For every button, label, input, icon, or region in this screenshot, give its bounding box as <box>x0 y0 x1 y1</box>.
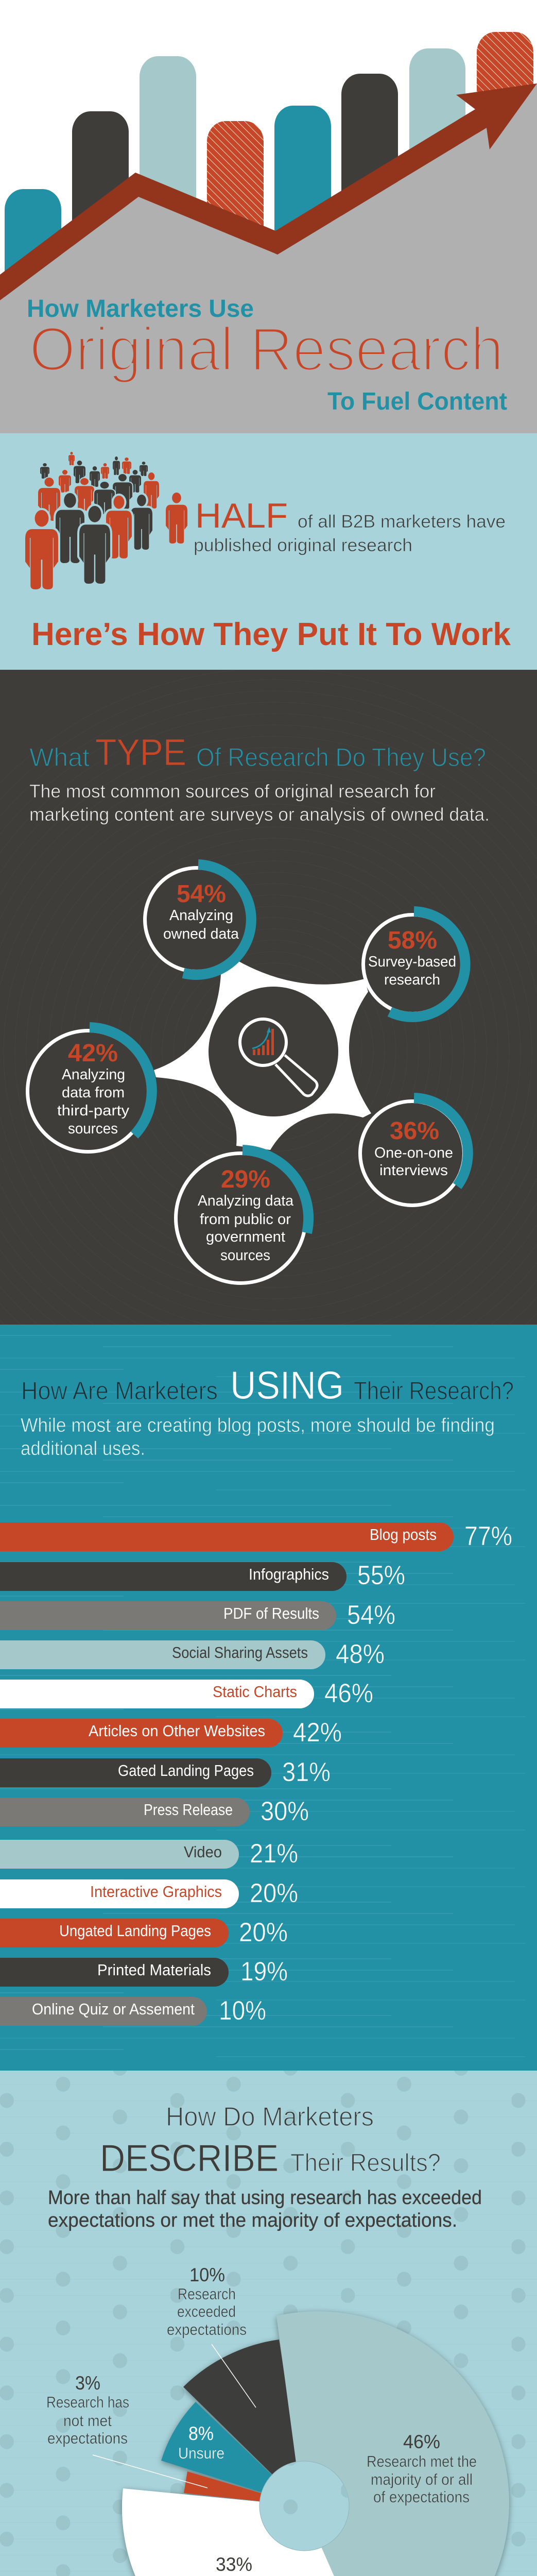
bar: printed materials 19%: 19% <box>240 1957 288 1987</box>
text: intro: More than half say that using research has exceeded <box>48 2187 482 2209</box>
bar: infographics 55%: 55% <box>357 1561 405 1590</box>
callout: 10% research exceeded expectations <box>167 2264 256 2408</box>
panel: hero header <box>0 0 537 433</box>
heading: how are marketers using: Their Research? <box>354 1377 514 1405</box>
ring: 36% one-on-one interviews <box>360 1098 468 1206</box>
callout: 3% research has not met expectations: 3% <box>75 2372 100 2394</box>
title: to fuel content: To Fuel Content <box>327 388 507 415</box>
bar: infographics 55% <box>0 1561 405 1591</box>
bar: interactive graphics 20%: Interactive Graphics <box>90 1883 222 1901</box>
text: intro: additional uses. <box>21 1438 145 1460</box>
bar: blog posts 77%: Blog posts <box>370 1526 437 1544</box>
bar: pdf of results 54% <box>0 1600 395 1630</box>
ring: 36% one-on-one interviews: interviews <box>379 1162 448 1179</box>
bar: online quiz or assement 10%: Online Quiz or Assement <box>32 2000 195 2018</box>
label: 46% research met the majority: majority of or all <box>371 2470 473 2488</box>
heading: what type of research do they use: TYPE <box>95 732 186 773</box>
bar: infographics 55%: Infographics <box>249 1565 329 1583</box>
bar chart: rising rounded bars <box>5 32 533 297</box>
label: 33% research met some <box>191 2554 278 2576</box>
heading: how do marketers: How Do Marketers <box>166 2102 374 2132</box>
bar: interactive graphics 20% <box>0 1878 298 1908</box>
ring: 29% analyzing data from public or government sources: sources <box>220 1247 270 1264</box>
bar: online quiz or assement 10%: 10% <box>219 1996 266 2026</box>
label: 8% unsure: Unsure <box>178 2444 224 2462</box>
heading: describe their results <box>100 2138 441 2179</box>
icon: single person <box>166 493 187 544</box>
label: 46% research met the majority <box>367 2431 477 2506</box>
heading: how are marketers using: USING <box>230 1364 344 1408</box>
ring: 29% analyzing data from public or government sources <box>176 1150 308 1283</box>
text: intro: expectations or met the majority of expectations. <box>48 2210 457 2231</box>
text: intro: While most are creating blog posts, more should be finding <box>21 1415 495 1436</box>
bar: printed materials 19%: Printed Materials <box>97 1961 211 1979</box>
text: intro <box>48 2187 482 2231</box>
ring: 29% analyzing data from public or government sources: Analyzing data <box>198 1193 294 1209</box>
callout: 3% research has not met expectations: expectations <box>47 2429 128 2447</box>
label: 46% research met the majority: Research met the <box>367 2452 477 2470</box>
ring: 54% analyzing owned data: 54% <box>177 880 226 908</box>
heading: what type of research do they use: Of Research Do They Use? <box>196 743 486 772</box>
ring: 42% analyzing data from third-party sources: third-party <box>57 1103 130 1119</box>
bar: ungated landing pages 20%: 20% <box>239 1918 288 1947</box>
bar: pdf of results 54%: 54% <box>347 1600 395 1630</box>
bar: video 21%: Video <box>184 1843 222 1861</box>
bar: articles on other websites 42% <box>0 1718 342 1748</box>
bar: online quiz or assement 10% <box>0 1996 266 2026</box>
icon: crowd of people <box>25 452 159 589</box>
ring: 58% survey-based research: research <box>384 972 440 988</box>
label: 46% research met the majority: of expectations <box>373 2488 470 2506</box>
ring: 54% analyzing owned data: owned data <box>163 926 239 942</box>
text: intro <box>21 1415 495 1460</box>
bar: gated landing pages 31%: Gated Landing Pages <box>118 1761 254 1780</box>
panel: how are marketers using their research <box>0 1325 537 2071</box>
bar: pdf of results 54%: PDF of Results <box>223 1604 319 1622</box>
bar: ungated landing pages 20% <box>0 1918 288 1947</box>
grey hill under arrow <box>0 83 537 433</box>
bar: press release 30%: Press Release <box>144 1801 233 1819</box>
callout: 3% research has not met expectations: Research has <box>46 2393 129 2411</box>
ring: 36% one-on-one interviews: One-on-one <box>374 1145 453 1161</box>
ring: 42% analyzing data from third-party sources: data from <box>62 1084 125 1101</box>
label: 8% unsure <box>178 2423 224 2462</box>
heading: how are marketers using <box>21 1364 514 1408</box>
heading: how are marketers using: How Are Marketers <box>21 1377 218 1405</box>
icon: magnifying glass with chart <box>240 1019 317 1096</box>
panel: how do marketers describe their results <box>0 2071 537 2576</box>
ring: 29% analyzing data from public or government sources: government <box>206 1229 285 1245</box>
bar: interactive graphics 20%: 20% <box>250 1878 298 1908</box>
callout: 3% research has not met expectations <box>46 2372 207 2488</box>
bar: social sharing assets 48% <box>0 1639 385 1669</box>
label: 8% unsure: 8% <box>188 2423 214 2444</box>
bar: static charts 46%: Static Charts <box>213 1683 297 1701</box>
bar: video 21%: 21% <box>250 1839 298 1869</box>
heading: what type of research do they use <box>29 732 486 773</box>
callout: 10% research exceeded expectations: expectations <box>167 2320 247 2338</box>
bar: static charts 46% <box>0 1679 373 1708</box>
bar: press release 30%: 30% <box>261 1797 309 1826</box>
callout: 10% research exceeded expectations: exceeded <box>177 2302 236 2320</box>
bar: static charts 46%: 46% <box>324 1679 373 1708</box>
bar: blog posts 77%: 77% <box>464 1521 512 1551</box>
label: 33% research met some: 33% <box>216 2554 252 2575</box>
heading: describe their results: DESCRIBE <box>100 2138 279 2179</box>
ring: 42% analyzing data from third-party sources: sources <box>68 1121 118 1137</box>
heading: describe their results: Their Results? <box>290 2149 441 2177</box>
heading: here's how they put it to work: Here’s How They Put It To Work <box>31 617 511 652</box>
title: how marketers use: How Marketers Use <box>27 295 254 323</box>
bar: press release 30% <box>0 1797 309 1826</box>
ring: 42% analyzing data from third-party sources <box>28 1027 152 1152</box>
bar: articles on other websites 42%: 42% <box>293 1718 342 1748</box>
stat: half: HALF <box>195 496 288 535</box>
ring: 29% analyzing data from public or government sources: 29% <box>221 1166 270 1193</box>
hub: white star connector <box>154 961 371 1150</box>
ring: 36% one-on-one interviews: 36% <box>390 1117 439 1145</box>
bar: social sharing assets 48%: Social Sharing Assets <box>172 1643 308 1662</box>
panel: half of marketers <box>0 433 537 670</box>
text: published original research: published original research <box>194 535 412 555</box>
ring: 58% survey-based research: Survey-based <box>368 954 456 970</box>
ring: 42% analyzing data from third-party sources: Analyzing <box>62 1066 125 1083</box>
hub: dark centre circle <box>209 987 338 1116</box>
ring: 58% survey-based research: 58% <box>388 927 437 954</box>
ring: 29% analyzing data from public or government sources: from public or <box>200 1211 291 1228</box>
bar: video 21% <box>0 1839 298 1869</box>
panel: what type of research <box>0 670 537 1325</box>
ring: 54% analyzing owned data <box>145 865 251 975</box>
ring: 54% analyzing owned data: Analyzing <box>169 907 233 924</box>
text: intro: marketing content are surveys or analysis of owned data. <box>29 804 490 825</box>
bar: printed materials 19% <box>0 1957 288 1987</box>
bar: ungated landing pages 20%: Ungated Landing Pages <box>59 1922 211 1940</box>
callout: 3% research has not met expectations: not met <box>63 2412 112 2430</box>
callout: 10% research exceeded expectations: Research <box>178 2285 236 2303</box>
text: intro: The most common sources of original research for <box>29 781 436 802</box>
arrow: growth trend <box>0 83 537 300</box>
callout: 10% research exceeded expectations: 10% <box>189 2264 225 2285</box>
bar: blog posts 77% <box>0 1521 512 1551</box>
bar: social sharing assets 48%: 48% <box>336 1639 385 1669</box>
text: of all b2b marketers have: of all B2B marketers have <box>298 512 506 532</box>
bar: gated landing pages 31%: 31% <box>282 1757 331 1787</box>
text: intro <box>29 781 490 825</box>
label: 46% research met the majority: 46% <box>403 2431 440 2452</box>
bar chart: uses of research <box>0 1521 512 2026</box>
title: original research: Original Research <box>29 315 504 384</box>
ring: 58% survey-based research <box>363 911 465 1017</box>
bar: gated landing pages 31% <box>0 1757 331 1787</box>
heading: what type of research do they use: What <box>29 743 90 772</box>
pie chart: results <box>122 2311 509 2576</box>
ring: 42% analyzing data from third-party sources: 42% <box>68 1040 118 1067</box>
bar: articles on other websites 42%: Articles on Other Websites <box>89 1722 265 1740</box>
